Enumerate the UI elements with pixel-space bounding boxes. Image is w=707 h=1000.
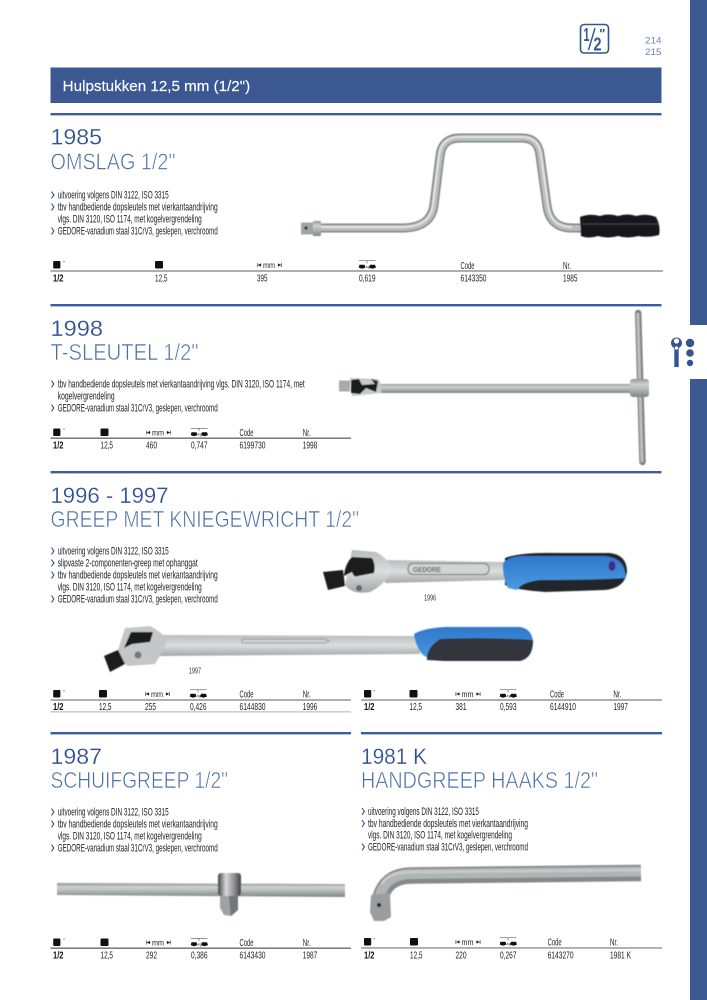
table: 1987: Code: [240, 938, 254, 949]
table: 1987: Nr.: [303, 938, 311, 949]
feature list: vlgs. DIN 3120, ISO 1174, met kogelvergrendeling: [58, 830, 202, 842]
table: 1981 K: mm: [462, 938, 474, 947]
feature list: GEDORE-vanadium staal 31CrV3, geslepen, verchroomd: [58, 225, 218, 237]
table: 1996: kg: [197, 694, 201, 698]
table: 1997: mm: [462, 690, 474, 699]
tool: L-handle: [370, 870, 641, 921]
table: 1987: 0,386: [191, 951, 208, 962]
feature list: tbv handbediende dopsleutels met vierkantaandrijving: [58, 569, 218, 581]
table: 1998: 1998: [303, 441, 317, 452]
caption: 1996: 1996: [424, 594, 436, 602]
table: 1987: ": [63, 938, 65, 944]
table: 1998: Code: [240, 428, 254, 439]
table: 1997: kg: [507, 694, 511, 698]
table: 1996: mm: [151, 690, 163, 699]
table: 1996: 0,426: [190, 702, 207, 713]
table: 1981 K: [361, 938, 662, 961]
feature list: uitvoering volgens DIN 3122, ISO 3315: [368, 806, 479, 818]
table: 1981 K: 1981 K: [610, 950, 631, 961]
table: 1985: ": [63, 261, 65, 267]
table: 1997: Nr.: [613, 690, 621, 701]
feature list: kogelvergrendeling: [58, 390, 115, 402]
feature list: tbv handbediende dopsleutels met vierkantaandrijving vlgs. DIN 3120, ISO 1174, met: [58, 378, 305, 390]
icon: 1/2 inch drive: [580, 24, 608, 54]
feature list: uitvoering volgens DIN 3122, ISO 3315: [58, 545, 169, 557]
table: 1981 K: 0,267: [500, 950, 517, 961]
heading: 1996 - 1997: 1996 - 1997: [50, 483, 168, 508]
table: 1987: 6143430: [240, 951, 266, 962]
icon: wrench and sockets tab: [671, 338, 694, 367]
heading: schuifgreep: SCHUIFGREEP 1/2": [50, 767, 228, 793]
panel: 1981 K: [361, 732, 662, 961]
header banner: [50, 68, 662, 103]
side band top: [690, 0, 707, 325]
table: 1987: kg: [198, 942, 202, 946]
table: 1987: mm: [152, 938, 164, 948]
caption: 1997: 1997: [189, 666, 201, 676]
table: 1981 K: kg: [507, 942, 511, 946]
icon: 1/2 inch drive: 2: [594, 34, 602, 54]
table: 1997: 381: [456, 702, 467, 713]
feature list: uitvoering volgens DIN 3122, ISO 3315: [58, 806, 169, 818]
feature list: vlgs. DIN 3120, ISO 1174, met kogelvergrendeling: [368, 829, 512, 841]
table: 1998: mm: [152, 428, 164, 438]
feature list: GEDORE-vanadium staal 31CrV3, geslepen, verchroomd: [58, 593, 218, 605]
page numbers: [645, 36, 662, 58]
table: 1985: 1985: [563, 273, 578, 284]
feature list: [52, 545, 218, 605]
feature list: [362, 806, 528, 853]
heading: t-sleutel: T-SLEUTEL 1/2": [50, 339, 198, 365]
table: 1997: [361, 690, 662, 713]
panel: 1998: [50, 304, 662, 462]
table: 1998: [50, 428, 351, 452]
table: 1985: mm: [263, 261, 275, 270]
table: 1985: Code: [460, 261, 475, 272]
table: 1981 K: ": [374, 938, 376, 944]
table: 1987: 12,5: [100, 951, 113, 962]
heading: 1981 K: 1981 K: [361, 744, 427, 769]
side band bottom: [690, 379, 707, 1000]
table: 1996: 12,5: [99, 702, 112, 713]
feature list: tbv handbediende dopsleutels met vierkantaandrijving: [58, 818, 218, 830]
table: 1996: ": [63, 690, 65, 696]
table: 1996: Nr.: [303, 690, 311, 701]
table: 1996: [50, 690, 351, 713]
table: 1998: kg: [198, 432, 202, 436]
table: 1998: Nr.: [303, 428, 311, 439]
table: 1998: 12,5: [100, 441, 113, 452]
heading: 1987: 1987: [50, 744, 102, 769]
table: 1981 K: 220: [456, 950, 467, 961]
tool: ratchet handle 1997: [104, 626, 533, 672]
tool: sliding T-handle: [57, 873, 345, 916]
heading: omslag: OMSLAG 1/2": [50, 148, 176, 174]
heading: 1998: 1998: [50, 316, 103, 341]
panel: 1996-1997: [50, 471, 662, 713]
table: 1996: Code: [240, 690, 254, 701]
table: 1996: 1/2: [53, 702, 64, 713]
table: 1997: 12,5: [410, 702, 422, 713]
page numbers: 215: [645, 47, 662, 58]
table: 1997: 6144910: [550, 702, 576, 713]
tool: ratchet handle 1996: GEDORE: [413, 565, 441, 574]
feature list: tbv handbediende dopsleutels met vierkantaandrijving: [58, 201, 218, 213]
feature list: vlgs. DIN 3120, ISO 1174, met kogelvergrendeling: [58, 213, 202, 225]
heading: 1985: 1985: [50, 124, 102, 150]
heading: greep met kniegewricht: GREEP MET KNIEGEWRICHT 1/2": [50, 506, 359, 532]
table: 1998: 6199730: [240, 441, 266, 452]
table: 1981 K: 12,5: [410, 950, 423, 961]
table: 1985: 1/2: [53, 273, 64, 284]
feature list: tbv handbediende dopsleutels met vierkantaandrijving: [368, 818, 528, 830]
table: 1985: 0,619: [359, 273, 376, 284]
table: 1985: [50, 261, 663, 284]
table: 1997: 1997: [613, 702, 628, 713]
table: 1987: [50, 938, 351, 962]
feature list: GEDORE-vanadium staal 31CrV3, geslepen, verchroomd: [58, 842, 218, 854]
header banner: Hulpstukken 12,5 mm (1/2"): [63, 78, 250, 95]
feature list: uitvoering volgens DIN 3122, ISO 3315: [58, 189, 169, 201]
table: 1998: 0,747: [191, 441, 208, 452]
table: 1997: ": [374, 690, 376, 696]
table: 1985: 12,5: [155, 273, 168, 284]
table: 1996: 1996: [303, 702, 317, 713]
panel: 1985: [50, 113, 663, 284]
icon: 1/2 inch drive: ": [598, 26, 606, 41]
panel: 1987: [50, 732, 351, 962]
feature list: GEDORE-vanadium staal 31CrV3, geslepen, verchroomd: [368, 841, 528, 853]
feature list: vlgs. DIN 3120, ISO 1174, met kogelvergrendeling: [58, 581, 202, 593]
table: 1985: Nr.: [563, 261, 571, 272]
feature list: [52, 189, 218, 237]
icon: 1/2 inch drive: 1: [584, 25, 590, 45]
feature list: [52, 806, 218, 854]
table: 1981 K: 6143270: [548, 950, 574, 961]
tool: ratchet handle 1996: [323, 550, 627, 593]
page numbers: 214: [645, 36, 662, 46]
tool: t-handle: [339, 313, 649, 462]
table: 1996: 6144830: [240, 702, 266, 713]
feature list: slipvaste 2-componenten-greep met ophanggat: [58, 557, 198, 569]
tool: speed brace: [301, 137, 660, 238]
table: 1997: 1/2: [364, 702, 375, 713]
table: 1987: 1987: [303, 951, 317, 962]
heading: handgreep haaks: HANDGREEP HAAKS 1/2": [361, 767, 598, 793]
feature list: [52, 378, 305, 414]
table: 1981 K: 1/2: [364, 950, 375, 961]
table: 1998: ": [63, 428, 65, 434]
table: 1987: 1/2: [53, 951, 64, 962]
table: 1996: 255: [145, 702, 156, 713]
table: 1985: 6143350: [460, 273, 487, 284]
table: 1997: 0,593: [500, 702, 517, 713]
table: 1997: Code: [550, 690, 564, 701]
table: 1985: 395: [257, 273, 268, 284]
table: 1998: 1/2: [53, 441, 64, 452]
feature list: GEDORE-vanadium staal 31CrV3, geslepen, verchroomd: [58, 402, 218, 414]
table: 1998: 460: [146, 441, 157, 452]
table: 1981 K: Nr.: [610, 938, 618, 949]
table: 1985: kg: [366, 265, 370, 269]
table: 1987: 292: [146, 951, 157, 962]
table: 1981 K: Code: [548, 938, 562, 949]
